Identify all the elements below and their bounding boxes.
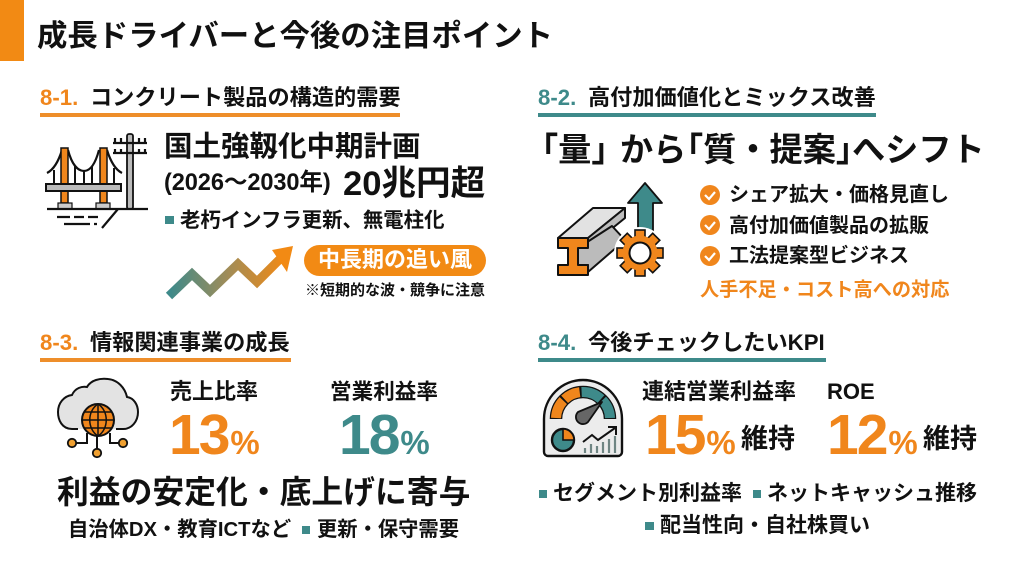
heading underline (40, 358, 291, 362)
checklist item 3: 工法提案型ビジネス (729, 245, 909, 267)
metric: sales ratio: 13% (169, 403, 260, 467)
metric: sales ratio: 売上比率 (170, 379, 258, 404)
icon: bridge and utility pole (45, 133, 148, 229)
bullet: infrastructure renewal: 老朽インフラ更新、無電柱化 (180, 210, 444, 232)
heading 8-3: 情報関連事業の成長 (90, 330, 290, 355)
heading 8-3: 8-3. (40, 330, 78, 355)
panel: 8-2 high value-added (525, 85, 985, 301)
header accent block (0, 0, 24, 61)
supporting line: 更新・保守需要 (317, 519, 459, 541)
icon: steel beam, gear and arrow (557, 182, 664, 277)
metric: ROE: 維持 (923, 424, 977, 454)
callout pill: tailwind: 中長期の追い風 (318, 247, 472, 272)
metric: ROE: ROE (827, 379, 875, 404)
metric: consolidated operating margin: 維持 (741, 424, 795, 454)
title: 成長ドライバーと今後の注目ポイント (37, 19, 553, 53)
checklist item 2: 高付加価値製品の拡販 (729, 215, 929, 237)
metric: operating margin: 18% (339, 403, 430, 467)
shift headline: 「量」 (525, 132, 625, 169)
heading underline (538, 113, 876, 116)
heading 8-2: 8-2. (538, 85, 576, 110)
KPI list: 配当性向・自社株買い (660, 514, 870, 537)
note: ※短期的な波・競争に注意 (305, 282, 485, 299)
heading 8-4: 8-4. (538, 330, 576, 355)
heading underline (538, 358, 826, 362)
plan name: 国土強靱化中期計画 (164, 131, 421, 163)
budget amount: 20兆円超 (343, 165, 485, 203)
conclusion headline: 利益の安定化・底上げに寄与 (57, 474, 470, 510)
orange note: 人手不足・コスト高への対応 (700, 280, 949, 301)
heading 8-1: 8-1. (40, 85, 78, 110)
heading 8-4: 今後チェックしたいKPI (588, 330, 825, 355)
metric: consolidated operating margin (642, 379, 796, 467)
shift headline: 「質・提案」 (670, 132, 869, 169)
KPI list: セグメント別利益率 (553, 482, 742, 505)
checklist item 1: シェア拡大・価格見直し (729, 184, 949, 206)
heading 8-2: 高付加価値化とミックス改善 (588, 85, 876, 110)
panel: 8-4 KPI (538, 330, 977, 537)
arrow: zigzag rising (166, 246, 293, 300)
callout pill: tailwind (304, 245, 486, 276)
metric: operating margin: 営業利益率 (330, 379, 438, 404)
shift headline: から (620, 132, 686, 169)
icon: cloud network (57, 378, 139, 458)
period: (2026～2030年) (164, 170, 331, 196)
supporting line: 自治体DX・教育ICTなど (68, 519, 291, 541)
heading underline (40, 113, 400, 116)
icon: gauge dashboard (542, 378, 624, 458)
metric: ROE (827, 379, 977, 467)
supporting line (68, 518, 459, 541)
metric: consolidated operating margin: 連結営業利益率 (642, 379, 796, 404)
shift headline (525, 132, 985, 169)
metric: consolidated operating margin: 15% (645, 403, 736, 467)
panel: 8-3 information business (40, 330, 470, 541)
metric: operating margin (330, 379, 438, 467)
heading 8-1: コンクリート製品の構造的需要 (90, 85, 401, 110)
shift headline: へシフト (852, 132, 985, 169)
KPI list: ネットキャッシュ推移 (767, 482, 977, 505)
metric: ROE: 12% (827, 403, 918, 467)
KPI list (539, 482, 977, 537)
panel: 8-1 concrete products (40, 85, 486, 300)
